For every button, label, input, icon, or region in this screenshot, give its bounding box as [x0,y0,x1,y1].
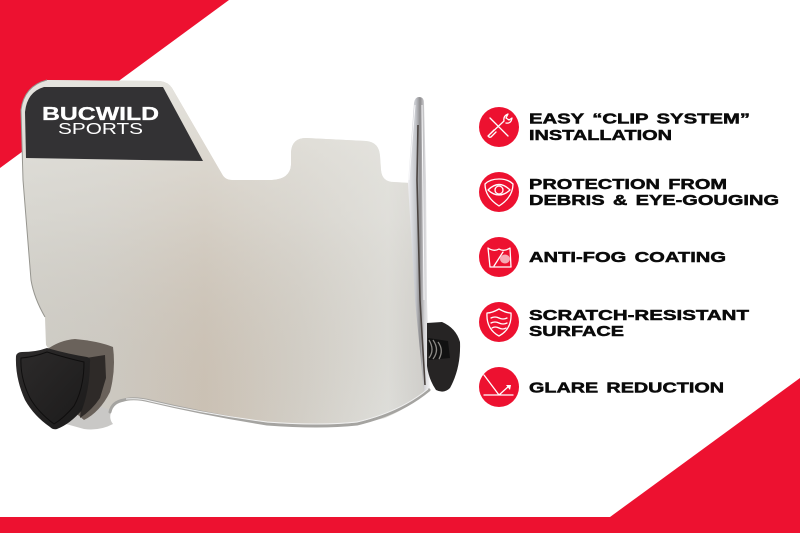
icon: wrench and screwdriver [479,107,519,147]
feature: anti-fog [479,237,726,277]
icon: reflected ray [479,367,519,407]
logo: sports: SPORTS [58,121,143,138]
visor lens [21,80,429,425]
visor right clip [427,322,460,392]
feature: protection [479,172,779,212]
icon: fogged lens [479,237,519,277]
red bar: bottom [0,517,800,533]
visor chrome bar [408,97,430,392]
visor left edge shading [21,80,47,317]
icon: eye in shield [479,172,519,212]
text: protection from: PROTECTION FROM [529,177,727,193]
text: installation: INSTALLATION [529,128,672,144]
logo: bucwild: BUCWILD [42,104,159,124]
text: easy clip system: EASY “CLIP SYSTEM” [529,112,750,128]
text: debris and eye-gouging: DEBRIS & EYE-GOUGING [529,193,779,209]
chrome under left clip [66,400,113,429]
red triangle: bottom right [610,378,800,517]
feature: glare reduction [479,367,724,407]
feature: easy clip system installation [479,107,750,147]
text: glare reduction: GLARE REDUCTION [529,380,724,396]
visor logo patch [25,87,203,161]
visor left clip [16,339,114,429]
text: anti-fog coating: ANTI-FOG COATING [529,250,726,266]
visor [16,80,460,429]
visor chrome bottom rim [110,390,429,426]
text: surface: SURFACE [529,324,624,340]
text: scratch-resistant: SCRATCH-RESISTANT [529,308,749,324]
red triangle: top left [0,0,229,168]
icon: shield with waves [479,302,519,342]
feature: scratch-resistant [479,302,749,342]
